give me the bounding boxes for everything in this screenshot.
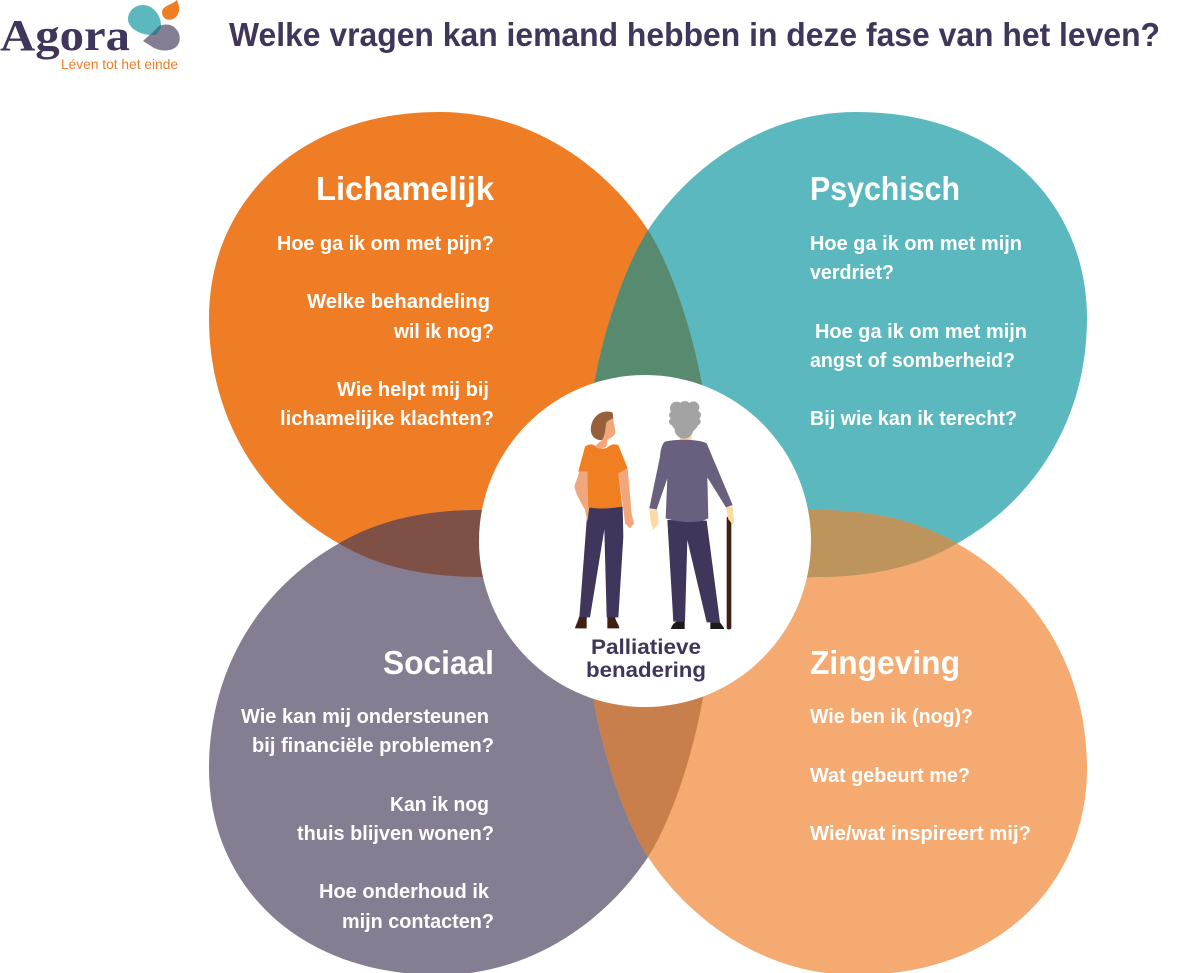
panel: Lichamelijk — [277, 170, 495, 430]
overlap: teal and peach — [807, 509, 957, 578]
logo wordmark: Agora — [0, 11, 130, 60]
questions: Psychisch: Hoe ga ik om met mijn — [815, 321, 1027, 343]
centre circle — [479, 375, 811, 707]
heading: Psychisch: Psychisch — [810, 170, 960, 207]
questions: Lichamelijk: Hoe ga ik om met pijn? — [277, 233, 494, 255]
questions: Zingeving: Wie/wat inspireert mij? — [810, 823, 1031, 845]
overlap: gray and peach — [593, 696, 703, 857]
older man — [649, 401, 734, 629]
blob: peach — [592, 509, 1087, 973]
centre label: benadering — [586, 659, 706, 682]
questions: Lichamelijk — [277, 233, 494, 430]
panel: Zingeving — [810, 644, 1031, 845]
logo: Agora — [0, 0, 180, 72]
questions: Lichamelijk: Welke behandeling — [307, 291, 490, 313]
questions: Sociaal: mijn contacten? — [342, 911, 494, 933]
heading: Zingeving: Zingeving — [810, 644, 960, 681]
questions: Sociaal: Hoe onderhoud ik — [319, 881, 490, 903]
overlap: orange and gray — [339, 510, 483, 578]
questions: Psychisch — [810, 233, 1027, 430]
panel: Psychisch — [810, 170, 1027, 430]
questions: Sociaal: Wie kan mij ondersteunen — [241, 706, 489, 728]
questions: Sociaal: bij financiële problemen? — [252, 735, 494, 757]
questions: Lichamelijk: wil ik nog? — [393, 321, 494, 343]
venn diagram blobs — [209, 112, 1087, 973]
heading: Lichamelijk: Lichamelijk — [316, 170, 495, 207]
blob: orange — [209, 112, 704, 578]
questions: Zingeving: Wie ben ik (nog)? — [810, 706, 973, 728]
illustration: woman and older man — [574, 401, 734, 629]
woman — [574, 412, 634, 628]
panel: Sociaal — [241, 644, 494, 933]
questions: Zingeving — [810, 706, 1031, 845]
questions: Zingeving: Wat gebeurt me? — [810, 765, 970, 787]
questions: Psychisch: Bij wie kan ik terecht? — [810, 408, 1017, 430]
overlap: orange and teal — [594, 230, 702, 386]
questions: Lichamelijk: lichamelijke klachten? — [280, 408, 494, 430]
questions: Sociaal — [241, 706, 494, 933]
questions: Psychisch: verdriet? — [810, 262, 894, 284]
questions: Sociaal: thuis blijven wonen? — [297, 823, 494, 845]
heading: Sociaal: Sociaal — [383, 644, 494, 681]
centre label: Palliatieve — [591, 636, 701, 659]
blob: teal — [592, 112, 1087, 578]
blob: gray — [209, 509, 704, 973]
questions: Psychisch: angst of somberheid? — [810, 350, 1015, 372]
questions: Lichamelijk: Wie helpt mij bij — [337, 379, 489, 401]
centre label — [586, 636, 706, 682]
title: Welke vragen kan iemand hebben in deze fase van het leven? — [229, 16, 1160, 53]
questions: Sociaal: Kan ik nog — [390, 794, 489, 816]
logo icon: drops — [128, 0, 180, 50]
logo tagline: Léven tot het einde — [61, 56, 178, 72]
questions: Psychisch: Hoe ga ik om met mijn — [810, 233, 1022, 255]
